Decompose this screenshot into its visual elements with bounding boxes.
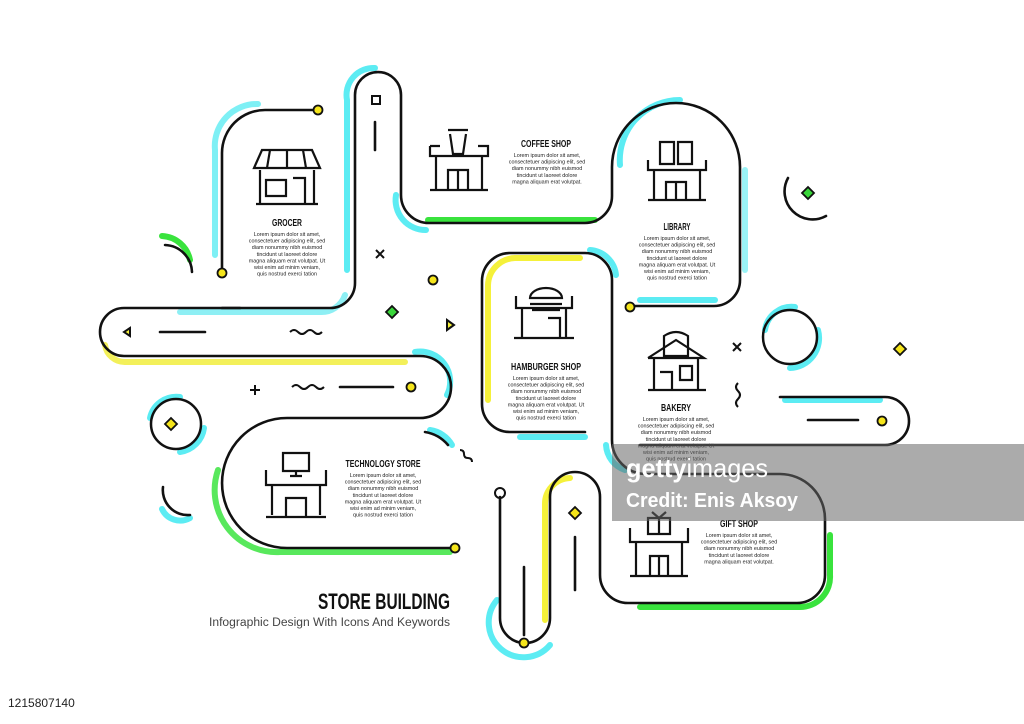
text: bakery: tincidunt ut laoreet dolore [646, 437, 706, 443]
text: hamburger: wisi enim ad minim veniam, [512, 409, 579, 415]
text: hamburger: tincidunt ut laoreet dolore [516, 396, 576, 402]
text: library [639, 222, 716, 282]
title: STORE BUILDING [318, 589, 450, 614]
text: bakery: quis nostrud exerci tation [646, 457, 706, 463]
watermark: Credit: Enis Aksoy [626, 490, 799, 512]
main path lines [100, 72, 909, 643]
text: gift shop: GIFT SHOP [720, 519, 758, 530]
text: technology store: TECHNOLOGY STORE [346, 459, 421, 470]
text: hamburger: diam nonummy nibh euismod [511, 389, 581, 395]
icon: grocer [254, 150, 320, 204]
text: bakery: consectetuer adipiscing elit, sed [638, 424, 714, 430]
text: hamburger: quis nostrud exerci tation [516, 416, 576, 422]
text: technology store: magna aliquam erat volutpat. Ut [345, 499, 422, 505]
text: gift shop: tincidunt ut laoreet dolore [709, 553, 769, 559]
text: hamburger: HAMBURGER SHOP [511, 362, 581, 373]
icon: technology [266, 453, 326, 517]
text: technology store: consectetuer adipiscing elit, sed [345, 480, 421, 486]
decorations [124, 96, 817, 498]
icon: coffee shop [430, 130, 488, 190]
text: library: consectetuer adipiscing elit, sed [639, 243, 715, 249]
text: grocer: magna aliquam erat volutpat. Ut [249, 258, 326, 264]
text: hamburger [508, 362, 585, 422]
text: grocer: quis nostrud exerci tation [257, 272, 317, 278]
image id [0, 690, 1024, 724]
watermark [612, 444, 1024, 521]
text: grocer: tincidunt ut laoreet dolore [257, 252, 317, 258]
glow accents [105, 68, 880, 657]
text: bakery: wisi enim ad minim veniam, [642, 450, 709, 456]
text: coffee shop: Lorem ipsum dolor sit amet, [514, 153, 580, 159]
text: technology store: wisi enim ad minim veniam, [349, 506, 416, 512]
icon: library [648, 142, 706, 200]
icon: gift [630, 512, 688, 576]
text: technology store [345, 459, 422, 519]
image id: 1215807140 [8, 696, 75, 710]
text: grocer: wisi enim ad minim veniam, [253, 265, 320, 271]
text: technology store: diam nonummy nibh euismod [348, 486, 418, 492]
text: gift shop: Lorem ipsum dolor sit amet, [706, 533, 772, 539]
text: bakery: diam nonummy nibh euismod [641, 430, 711, 436]
text: bakery: Lorem ipsum dolor sit amet, [643, 417, 709, 423]
text: bakery: BAKERY [661, 403, 691, 414]
icon: hamburger [514, 288, 574, 338]
icon: bakery [648, 332, 706, 390]
text: technology store: quis nostrud exerci tation [353, 513, 413, 519]
text: coffee shop: consectetuer adipiscing elit, sed [509, 160, 585, 166]
text: library: quis nostrud exerci tation [647, 276, 707, 282]
text: coffee shop [509, 139, 585, 185]
text: technology store: tincidunt ut laoreet dolore [353, 493, 413, 499]
text: gift shop: magna aliquam erat volutpat. [704, 559, 774, 565]
text: grocer: Lorem ipsum dolor sit amet, [254, 232, 320, 238]
text: hamburger: Lorem ipsum dolor sit amet, [513, 376, 579, 382]
text: hamburger: consectetuer adipiscing elit, sed [508, 383, 584, 389]
text: hamburger: magna aliquam erat volutpat. Ut [508, 402, 585, 408]
text: coffee shop: COFFEE SHOP [521, 139, 571, 150]
text: coffee shop: magna aliquam erat volutpat. [512, 179, 582, 185]
text: gift shop [701, 519, 777, 565]
text: technology store: Lorem ipsum dolor sit amet, [350, 473, 416, 479]
watermark: gettyimages [626, 453, 768, 483]
text: grocer [249, 218, 326, 278]
text: grocer: consectetuer adipiscing elit, sed [249, 239, 325, 245]
subtitle: Infographic Design With Icons And Keywords [209, 617, 450, 629]
text: library: wisi enim ad minim veniam, [643, 269, 710, 275]
text: grocer: GROCER [272, 218, 303, 229]
title [209, 589, 450, 629]
text: gift shop: consectetuer adipiscing elit, sed [701, 540, 777, 546]
text: coffee shop: diam nonummy nibh euismod [512, 166, 582, 172]
text: library: magna aliquam erat volutpat. Ut [639, 262, 716, 268]
text: library: LIBRARY [664, 222, 691, 233]
text: coffee shop: tincidunt ut laoreet dolore [517, 173, 577, 179]
text: library: Lorem ipsum dolor sit amet, [644, 236, 710, 242]
text: bakery: magna aliquam erat volutpat. Ut [638, 443, 715, 449]
text: bakery [638, 403, 715, 463]
text: library: diam nonummy nibh euismod [642, 249, 712, 255]
text: library: tincidunt ut laoreet dolore [647, 256, 707, 262]
text: grocer: diam nonummy nibh euismod [252, 245, 322, 251]
text: gift shop: diam nonummy nibh euismod [704, 546, 774, 552]
